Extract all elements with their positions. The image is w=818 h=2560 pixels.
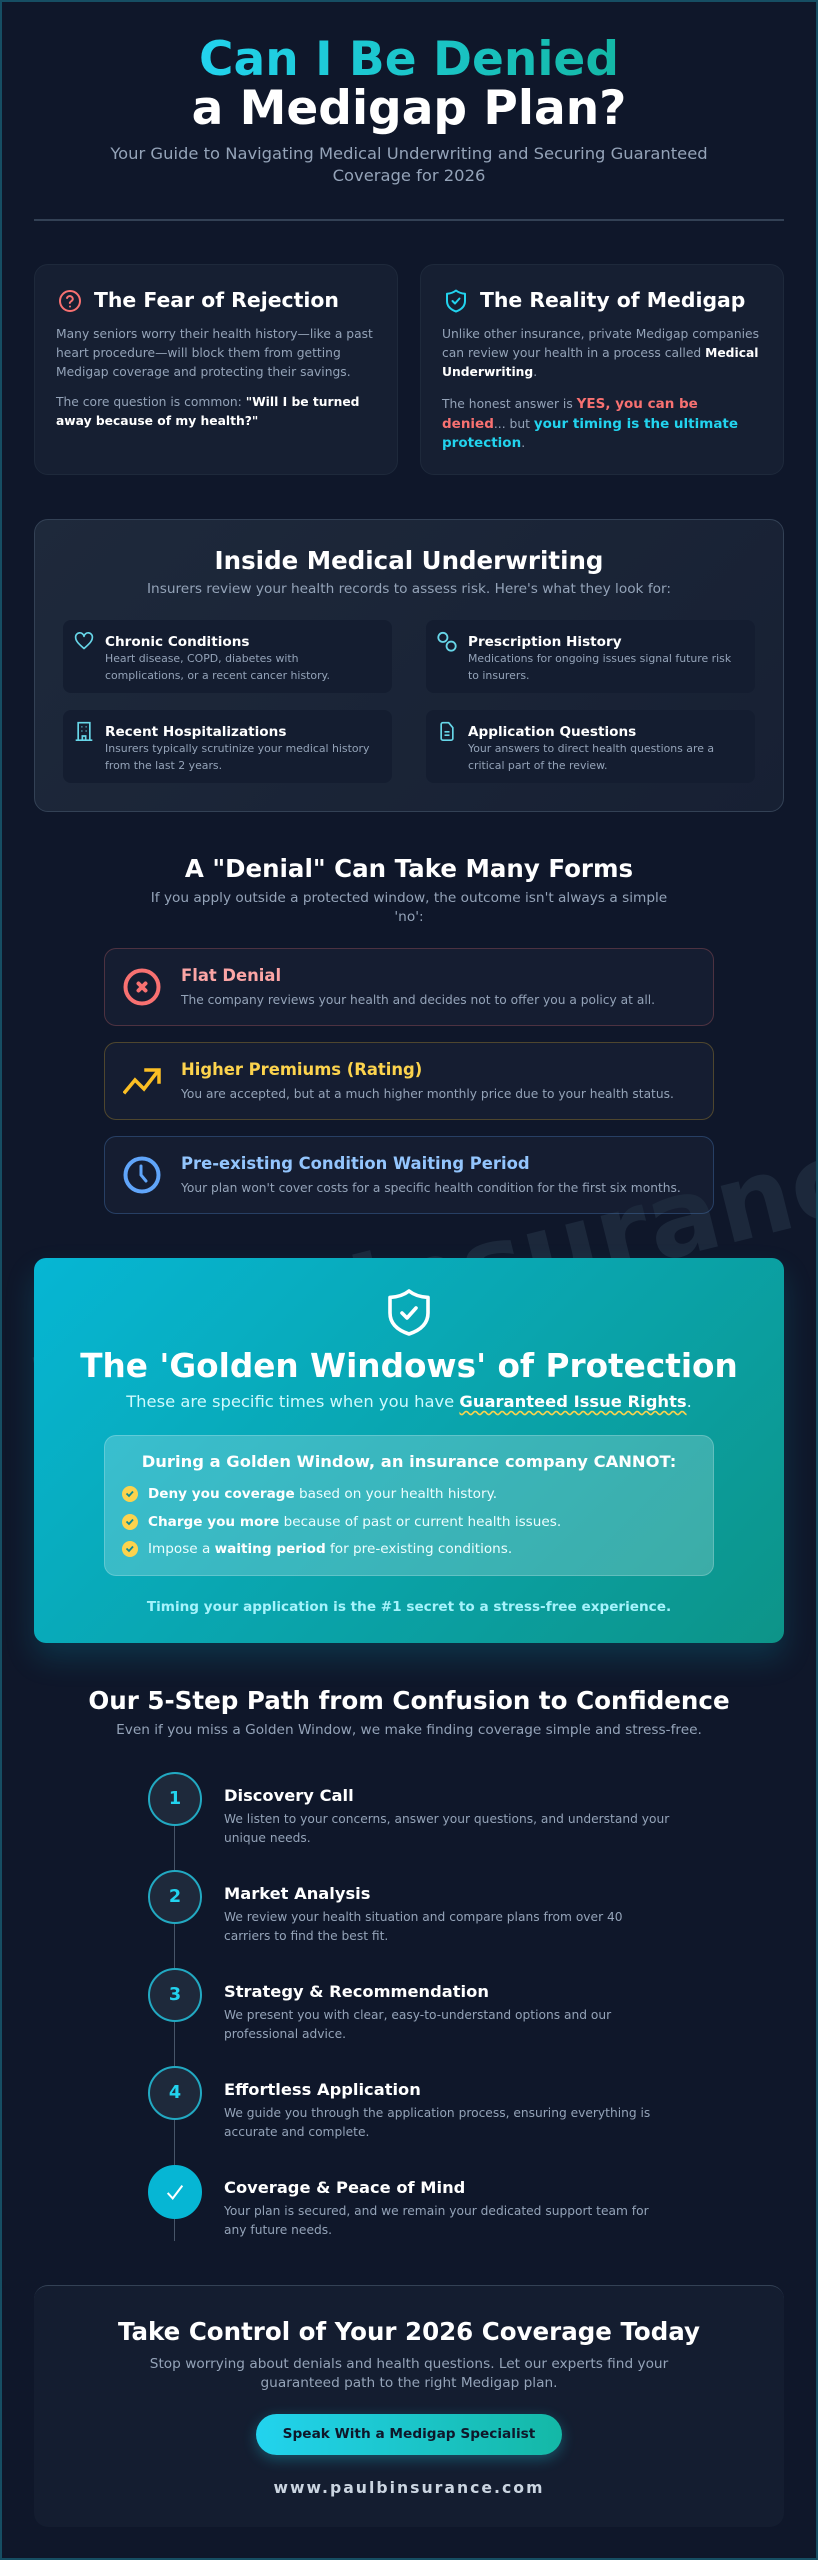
panel: the reality of medigap [420, 264, 784, 475]
subheading [151, 890, 667, 925]
step 3 circle: 3 [169, 1985, 181, 2005]
card: waiting period [104, 1136, 714, 1214]
step 1 text: unique needs. [224, 1831, 311, 1845]
card: recent hospitalizations [63, 710, 392, 783]
text block [150, 2356, 668, 2391]
icon: x circle [124, 968, 160, 1006]
heading: inside medical underwriting: Inside Medical Underwriting [215, 546, 603, 575]
button [256, 2414, 562, 2455]
card: higher premiums: Higher Premiums (Rating) [181, 1060, 422, 1079]
icon: question circle [59, 290, 81, 312]
step 5 text: Coverage & Peace of Mind [224, 2178, 465, 2197]
text block: honest answer: The honest answer is YES, you can be [442, 396, 698, 412]
step 1 circle [148, 1772, 202, 1826]
card: recent hospitalizations: from the last 2 years. [105, 758, 222, 772]
icon: check [122, 1486, 138, 1502]
step 1 text: We listen to your concerns, answer your questions, and understand your [224, 1812, 669, 1826]
text block: heart procedure—will block them from getting [56, 346, 341, 360]
icon: shield [388, 1289, 430, 1336]
subheading: 'no': [394, 909, 424, 925]
title: a Medigap Plan? [192, 81, 626, 136]
step 2 text: carriers to find the best fit. [224, 1929, 388, 1943]
icon: check [167, 2185, 184, 2200]
subtitle: Coverage for 2026 [333, 166, 485, 185]
card: recent hospitalizations: Insurers typically scrutinize your medical history [105, 742, 369, 755]
card: flat denial [104, 948, 714, 1026]
text block: Many seniors worry their health history—like a past [56, 327, 373, 341]
icon: clock [124, 1156, 160, 1194]
icon: building [76, 722, 92, 741]
button: Speak With a Medigap Specialist [283, 2426, 535, 2442]
subtitle [110, 144, 708, 185]
callout closing line: Timing your application is the #1 secret to a stress-free experience. [147, 1599, 671, 1615]
callout: cannot box [104, 1435, 714, 1576]
text block: honest answer: denied... but your timing is the ultimate [442, 416, 738, 432]
text block: core question [56, 395, 359, 428]
text block: core question: The core question is common: "Will I be turned [56, 395, 359, 409]
panel: golden windows [34, 1258, 784, 1643]
step 2 circle [148, 1870, 202, 1924]
card: application questions [426, 710, 755, 783]
step 1 circle: 1 [169, 1789, 181, 1809]
icon: check [122, 1541, 138, 1557]
step 3 text: Strategy & Recommendation [224, 1982, 489, 2001]
card: higher premiums [104, 1042, 714, 1120]
icon: trending up [123, 1068, 161, 1094]
card: waiting period: Your plan won't cover costs for a specific health condition for the first six months. [181, 1181, 681, 1195]
text block: Stop worrying about denials and health questions. Let our experts find your [150, 2356, 668, 2372]
text block: honest answer: protection. [442, 435, 525, 451]
subtitle: Your Guide to Navigating Medical Underwriting and Securing Guaranteed [110, 144, 708, 163]
icon: check [122, 1514, 138, 1530]
title: Can I Be Denied [199, 32, 619, 87]
heading: The 'Golden Windows' of Protection [80, 1347, 738, 1385]
card: application questions: critical part of the review. [468, 758, 608, 772]
step 5 text: Your plan is secured, and we remain your dedicated support team for [224, 2204, 649, 2218]
text block [442, 327, 759, 379]
card: prescription history: Medications for ongoing issues signal future risk [468, 652, 731, 665]
card: chronic conditions: Heart disease, COPD, diabetes with [105, 652, 299, 665]
step 5 circle [148, 2165, 202, 2219]
panel: call to action [34, 2285, 784, 2527]
step 2 circle: 2 [169, 1887, 181, 1907]
step 2 text [224, 1884, 623, 1943]
step 2 text: Market Analysis [224, 1884, 370, 1903]
card: recent hospitalizations: Recent Hospitalizations [105, 724, 286, 740]
title [192, 32, 626, 136]
list item: charge: Charge you more because of past or current health issues. [148, 1514, 561, 1530]
card: waiting period: Pre-existing Condition Waiting Period [181, 1154, 530, 1173]
card: prescription history: to insurers. [468, 668, 529, 682]
heading: The Reality of Medigap [480, 288, 745, 312]
step 3 text [224, 1982, 612, 2041]
list item: impose: Impose a waiting period for pre-existing conditions. [148, 1541, 512, 1557]
icon: document [440, 722, 454, 741]
text block: guaranteed path to the right Medigap plan. [260, 2375, 557, 2391]
step 2 text: We review your health situation and compare plans from over 40 [224, 1910, 623, 1924]
step 4 text: We guide you through the application process, ensuring everything is [224, 2106, 650, 2120]
text block: Medigap coverage and protecting their savings. [56, 365, 351, 379]
step 1 text: Discovery Call [224, 1786, 354, 1805]
card: application questions: Application Questions [468, 724, 636, 740]
header [110, 32, 708, 185]
card: application questions: Your answers to direct health questions are a [468, 742, 714, 755]
card: prescription history: Prescription History [468, 634, 622, 650]
card: chronic conditions [63, 620, 392, 693]
icon: shield check [446, 290, 466, 312]
subheading: These are specific times when you have Guaranteed Issue Rights. [126, 1392, 692, 1411]
text block: Unlike other insurance, private Medigap companies [442, 327, 759, 341]
heading: The Fear of Rejection [94, 288, 339, 312]
step 3 text: professional advice. [224, 2027, 346, 2041]
heading: a denial can take many forms: A "Denial" Can Take Many Forms [185, 854, 633, 883]
step 4 text [224, 2080, 650, 2139]
card: flat denial: Flat Denial [181, 966, 281, 985]
step 4 circle [148, 2066, 202, 2120]
text block: Underwriting. [442, 365, 537, 379]
card: flat denial: The company reviews your health and decides not to offer you a policy at all. [181, 993, 655, 1007]
subheading: Even if you miss a Golden Window, we make finding coverage simple and stress-free. [116, 1722, 702, 1738]
step 3 text: We present you with clear, easy-to-understand options and our [224, 2008, 611, 2022]
subheading: Insurers review your health records to assess risk. Here's what they look for: [147, 581, 671, 597]
card: chronic conditions: complications, or a recent cancer history. [105, 668, 330, 682]
list item: deny: Deny you coverage based on your health history. [148, 1486, 497, 1502]
card: chronic conditions: Chronic Conditions [105, 634, 249, 650]
text block: core question: away because of my health?" [56, 414, 258, 428]
card: higher premiums: You are accepted, but at a much higher monthly price due to your health status. [181, 1087, 674, 1101]
subheading: If you apply outside a protected window, the outcome isn't always a simple [151, 890, 667, 906]
text block [56, 327, 373, 379]
callout heading: During a Golden Window, an insurance company CANNOT: [142, 1452, 676, 1471]
website: www.paulbinsurance.com [274, 2478, 544, 2497]
heading: Take Control of Your 2026 Coverage Today [118, 2317, 700, 2346]
step 4 text: Effortless Application [224, 2080, 421, 2099]
text block: can review your health in a process called Medical [442, 346, 759, 360]
step 3 circle [148, 1968, 202, 2022]
icon: pills [437, 632, 457, 652]
text block: honest answer [442, 396, 738, 451]
heading: 5-step path: Our 5-Step Path from Confusion to Confidence [88, 1686, 730, 1715]
card: prescription history [426, 620, 755, 693]
step 4 circle: 4 [169, 2083, 181, 2103]
step 5 text [224, 2178, 649, 2237]
icon: heart [74, 632, 94, 650]
step 1 text [224, 1786, 670, 1845]
step 5 text: any future needs. [224, 2223, 332, 2237]
panel: the fear of rejection [34, 264, 398, 475]
panel: inside medical underwriting [34, 519, 784, 812]
step 4 text: accurate and complete. [224, 2125, 369, 2139]
